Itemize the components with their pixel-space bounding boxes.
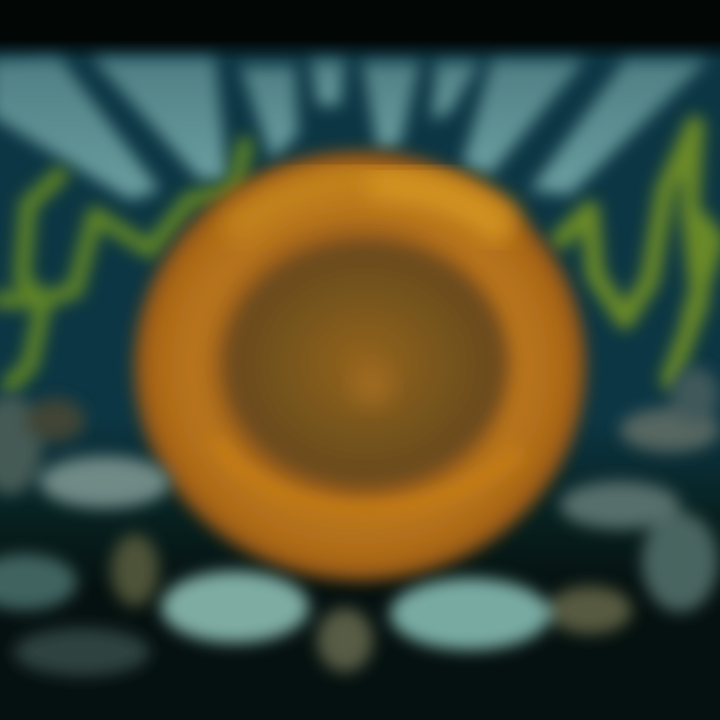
large gold coin: [134, 151, 586, 581]
coin highlight: [230, 181, 510, 235]
chart line: left: [0, 145, 245, 385]
coin pile: right: [560, 367, 720, 612]
inner disc: [223, 240, 507, 488]
coin pile: bottom centre: [161, 571, 632, 672]
coin pile: left: [0, 395, 170, 676]
centre glow: [352, 365, 392, 405]
chart line: right: [560, 125, 715, 380]
light rays: [0, 58, 708, 200]
